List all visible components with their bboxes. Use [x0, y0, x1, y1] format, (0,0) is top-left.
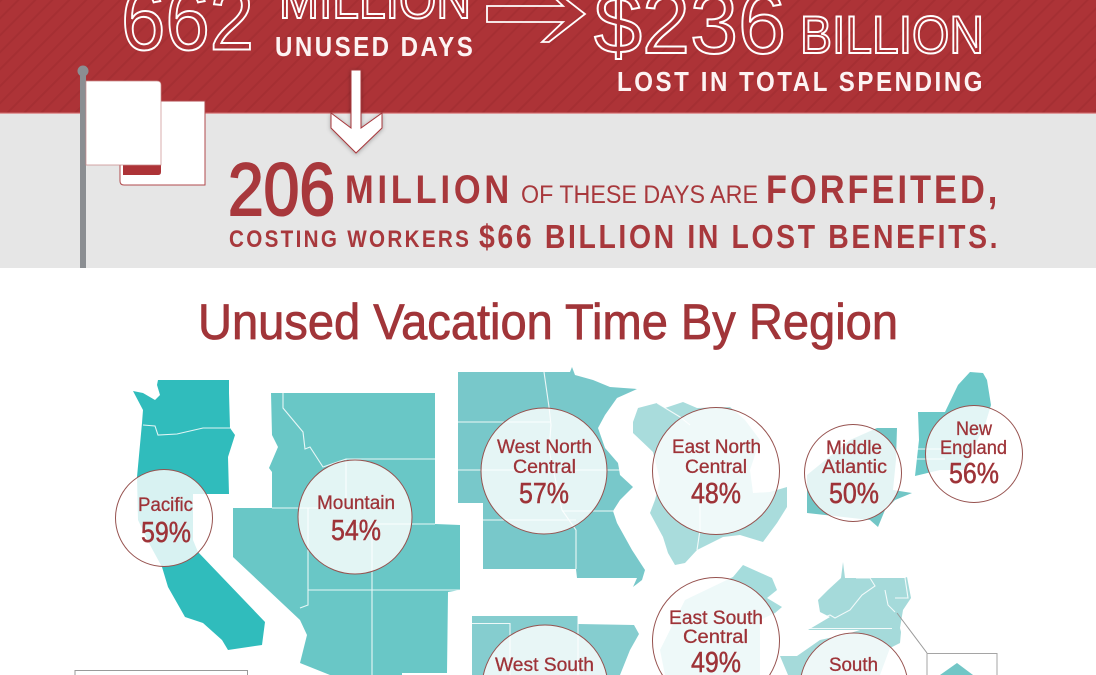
arrow: right	[487, 0, 585, 42]
callout: east north central: 48%	[691, 478, 741, 510]
callout: inset box	[897, 613, 997, 675]
map: east north central	[633, 402, 787, 565]
map: mountain	[233, 393, 460, 675]
label: lost in total spending: LOST IN TOTAL SPENDING	[617, 65, 982, 97]
map: west north central	[458, 367, 645, 587]
callout: new england	[926, 406, 1022, 502]
callout: east south central	[652, 578, 780, 675]
callout: new england: England	[940, 438, 1007, 459]
stat: 236 billion dollars: BILLION	[800, 6, 984, 65]
map: middle atlantic	[807, 428, 912, 527]
icon: flag	[78, 66, 205, 268]
text: of these days are: OF THESE DAYS ARE	[521, 181, 758, 209]
panel: forfeited days	[0, 114, 1096, 268]
stat: 662 million	[121, 0, 471, 68]
callout: middle atlantic	[804, 424, 902, 522]
stat: 206: 206	[228, 148, 335, 231]
callout: west north central: West North	[497, 437, 592, 458]
callout: east north central: East North	[672, 437, 761, 458]
map: east south central	[660, 565, 782, 675]
callout: pacific: 59%	[141, 517, 191, 549]
callout: east south central: Central	[683, 627, 748, 648]
callout: pacific: Pacific	[138, 495, 193, 516]
legend box	[75, 670, 248, 675]
callout: west north central: 57%	[519, 478, 569, 510]
text: forfeited: FORFEITED,	[766, 167, 997, 212]
callout: mountain	[298, 460, 412, 574]
callout: west north central: Central	[513, 457, 576, 478]
callout: south atlantic	[800, 633, 908, 675]
arrow: down	[331, 70, 382, 153]
callout: west north central	[481, 408, 607, 534]
text: million: MILLION	[345, 167, 509, 212]
callout: middle atlantic: Middle	[826, 438, 882, 459]
panel: total unused days banner	[0, 0, 1096, 114]
text: costing workers: COSTING WORKERS	[229, 226, 469, 252]
callout: mountain: Mountain	[317, 493, 395, 514]
map: new england	[915, 372, 991, 476]
map: pacific	[133, 380, 265, 650]
heading: unused vacation time by region: Unused Vacation Time By Region	[198, 294, 898, 350]
label: unused days: UNUSED DAYS	[275, 30, 473, 62]
callout: mountain: 54%	[331, 515, 381, 547]
callout: middle atlantic: Atlantic	[822, 457, 887, 478]
callout: east north central	[652, 408, 780, 534]
text: 66 billion in lost benefits: $66 BILLION IN LOST BENEFITS.	[479, 218, 998, 256]
callout: new england: New	[956, 419, 992, 440]
callout: east north central: Central	[685, 457, 747, 478]
map: south atlantic	[780, 562, 911, 675]
map: west south central	[472, 616, 639, 675]
callout: middle atlantic: 50%	[829, 478, 879, 510]
callout: east south central: East South	[669, 608, 763, 629]
callout: new england: 56%	[949, 458, 999, 490]
callout: pacific	[116, 470, 212, 566]
icon: inset diamond	[940, 663, 973, 675]
callout: west south central	[482, 625, 608, 675]
stat: 236 billion dollars	[594, 0, 984, 72]
